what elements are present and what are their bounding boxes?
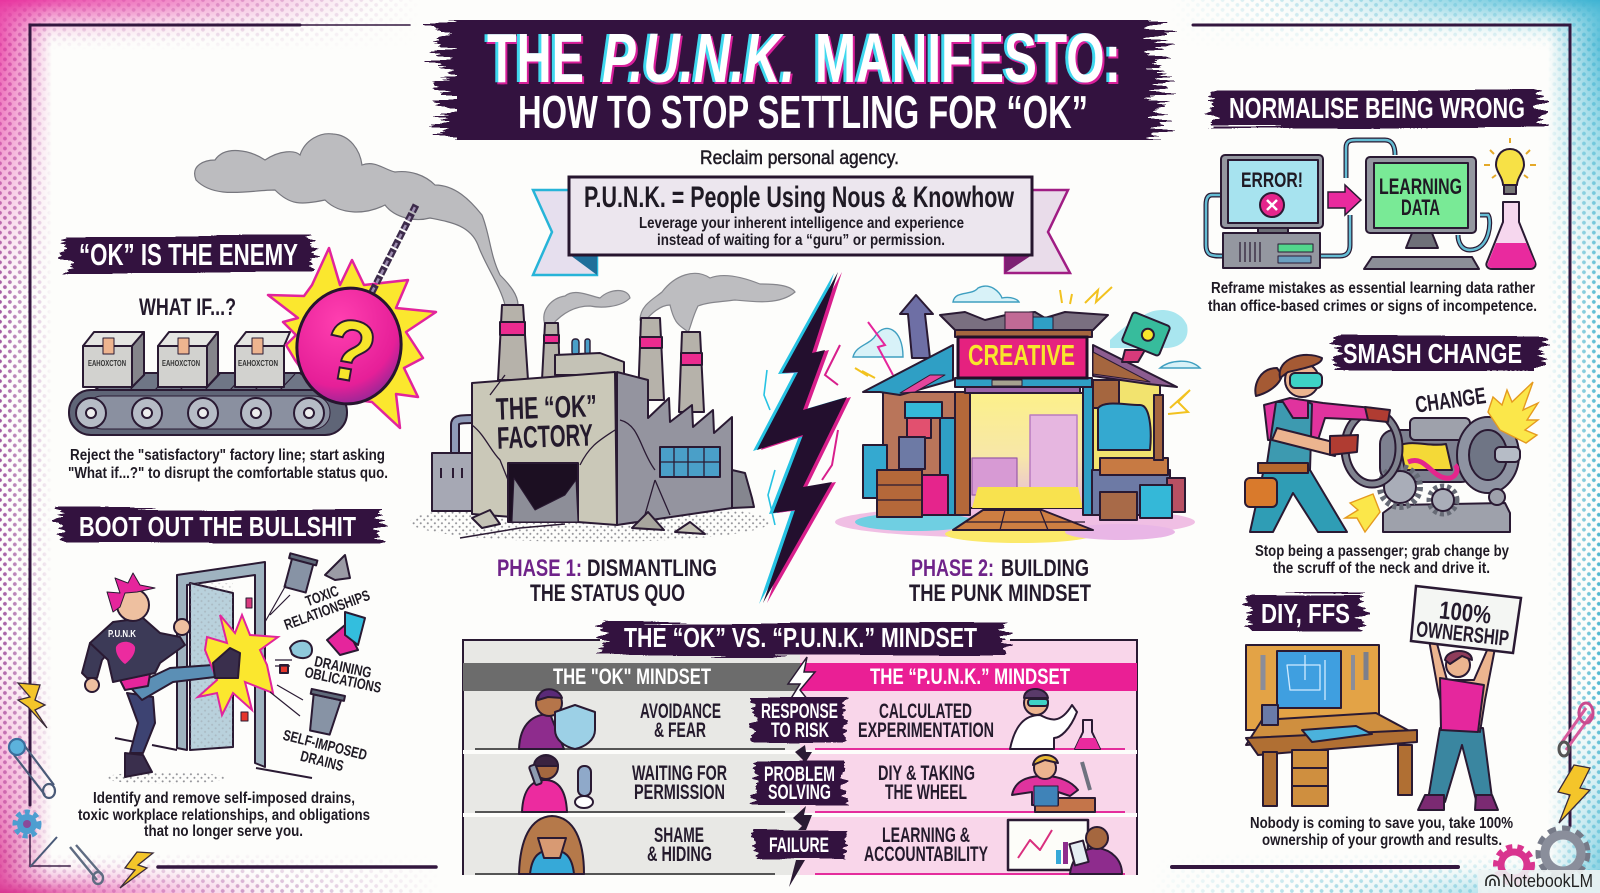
- flask: [1486, 202, 1536, 269]
- rubble: [460, 510, 705, 538]
- flying icons: [241, 553, 365, 736]
- factory label: THE “OK”: [495, 388, 597, 427]
- chimneys: [498, 305, 704, 412]
- drain labels: OBLICATIONS: [303, 664, 383, 697]
- ribbon heading: P.U.N.K. = People Using Nous & Knowhow: [584, 181, 1014, 214]
- center badge: [754, 830, 846, 859]
- walls: [883, 380, 1185, 515]
- legs: [1250, 470, 1347, 532]
- body text: [1250, 815, 1513, 849]
- title line 1: P.U.N.K.: [602, 19, 795, 97]
- machine: [1345, 412, 1520, 532]
- left label: [647, 824, 712, 866]
- body text: [1255, 543, 1509, 577]
- left label: & FEAR: [654, 719, 706, 742]
- overalls: [1266, 402, 1312, 470]
- column headers: THE "OK" MINDSET: [553, 664, 711, 689]
- column headers: THE “P.U.N.K.” MINDSET: [870, 664, 1070, 689]
- icon: pink gear: [1496, 847, 1532, 883]
- table title: THE “OK” VS. “P.U.N.K.” MINDSET: [624, 622, 977, 653]
- head: [117, 589, 149, 621]
- mohawk: [107, 573, 155, 612]
- ground shadow: [105, 772, 225, 784]
- standing boot: [125, 753, 152, 777]
- right label: DIY & TAKING: [878, 762, 975, 785]
- factory label: [495, 388, 597, 456]
- phase 2 caption: [909, 555, 1091, 607]
- drain labels: SELF-IMPOSED: [281, 727, 369, 764]
- left label: PERMISSION: [634, 781, 725, 804]
- section: boot out the bullshit: [60, 509, 383, 840]
- body text: [68, 447, 388, 482]
- icon: pink safety pin: [1559, 703, 1593, 756]
- jacket: [90, 618, 185, 682]
- factory label: FACTORY: [496, 417, 594, 456]
- creative sign: CREATIVE: [968, 340, 1075, 372]
- left label: [632, 762, 727, 804]
- boxes: EAHOXCTON: [88, 359, 126, 368]
- arrow: [1328, 185, 1361, 215]
- drain labels: DRAINS: [298, 748, 345, 775]
- left label: [640, 700, 721, 742]
- belt: [1258, 463, 1308, 473]
- jacket text: P.U.N.K: [108, 629, 137, 640]
- learning data computer: [1364, 157, 1479, 269]
- error computer: [1221, 155, 1323, 268]
- left label: & HIDING: [647, 843, 712, 866]
- gloves: [1365, 407, 1390, 422]
- heading: BOOT OUT THE BULLSHIT: [79, 511, 356, 542]
- left arm: [82, 643, 108, 678]
- phase 1 caption: PHASE 1:: [497, 555, 582, 582]
- heading: SMASH CHANGE: [1343, 338, 1522, 369]
- flask liquid: [1488, 243, 1535, 268]
- center badge: PROBLEM: [764, 763, 835, 786]
- section: OK is the enemy: [66, 205, 436, 482]
- drain labels: RELATIONSHIPS: [282, 587, 372, 634]
- right label: LEARNING &: [882, 824, 970, 847]
- arrow sign: [900, 295, 933, 358]
- factory cracks: [472, 375, 670, 525]
- punk figure: [82, 573, 215, 777]
- ribbon tails: [533, 190, 1070, 275]
- divider bolt: [788, 657, 815, 887]
- central lightning bolt: [753, 272, 851, 604]
- body text: than office-based crimes or signs of incompetence.: [1208, 298, 1537, 315]
- heading: [66, 236, 312, 274]
- center badge: RESPONSE: [761, 700, 838, 723]
- phase 2 caption: BUILDING: [1001, 555, 1089, 582]
- icon: yellow bolt right: [1558, 765, 1590, 823]
- left icon: worried person with shield: [519, 689, 595, 749]
- row: problem solving: [522, 755, 1095, 812]
- left icon: person on phone: [522, 755, 593, 812]
- learning data computer: LEARNING: [1379, 174, 1462, 199]
- right icon: scientist with flask: [1010, 689, 1100, 749]
- upper block: [555, 353, 624, 375]
- center badge: FAILURE: [769, 834, 829, 857]
- icon: blue gear: [15, 812, 39, 836]
- creative sign: [958, 337, 1087, 378]
- row: response to risk: [519, 689, 1100, 749]
- creative shack illustration: [835, 286, 1200, 607]
- ground splash: [835, 506, 1195, 543]
- factory window: [660, 447, 720, 477]
- phase 2 caption: PHASE 2:: [911, 555, 994, 582]
- icon: grey safety pin: [70, 845, 103, 884]
- factory illustration: [410, 273, 795, 607]
- brush stroke backing: [440, 20, 1160, 140]
- section: smash change: [1245, 335, 1542, 577]
- left fist: [85, 678, 99, 692]
- left icon: person hiding face: [519, 816, 584, 874]
- ribbon body text: Leverage your inherent intelligence and experience: [639, 215, 964, 232]
- body text: toxic workplace relationships, and obligations: [78, 807, 370, 824]
- icon: blue safety pin: [9, 739, 55, 798]
- roof: [863, 312, 1177, 395]
- body text: Nobody is coming to save you, take 100%: [1250, 815, 1513, 832]
- kicking leg: [130, 665, 215, 700]
- center badge: SOLVING: [768, 781, 831, 804]
- clouds: [853, 286, 1200, 368]
- crates and floor: [863, 445, 1172, 530]
- lower arm: [1272, 428, 1337, 456]
- body text: Stop being a passenger; grab change by: [1255, 543, 1509, 560]
- heading: [1248, 594, 1362, 631]
- ribbon body text: [639, 215, 964, 249]
- title line 1: MANIFESTO:: [815, 19, 1121, 97]
- big smoke plume: [195, 134, 518, 305]
- section: normalise being wrong: [1206, 89, 1541, 315]
- body text: "What if...?" to disrupt the comfortable status quo.: [68, 465, 388, 482]
- wrecking ball: [268, 205, 436, 428]
- factory right face: [617, 372, 732, 525]
- heading: “OK” IS THE ENEMY: [79, 237, 298, 272]
- standing leg: [127, 693, 155, 753]
- conveyor belt: [69, 373, 347, 435]
- factory front face: [472, 372, 617, 525]
- section: DIY FFS: [1246, 586, 1521, 849]
- table body: [463, 640, 1137, 875]
- icon: yellow bolt bottom: [120, 852, 153, 888]
- door: [115, 562, 312, 778]
- right fist: [174, 619, 190, 635]
- jacket emblem: [116, 642, 135, 664]
- center badge: TO RISK: [771, 719, 829, 742]
- body text: [1208, 280, 1537, 315]
- body text: that no longer serve you.: [144, 823, 303, 840]
- goggles: [1290, 373, 1322, 388]
- decorative badges and pins: [9, 683, 1593, 888]
- learning data computer: DATA: [1401, 195, 1440, 220]
- column headers: [463, 663, 1137, 691]
- right label: EXPERIMENTATION: [858, 719, 994, 742]
- tool pouch: [1245, 478, 1277, 507]
- factory smoke: [544, 273, 795, 332]
- heading: [1212, 89, 1541, 128]
- right label: [878, 762, 975, 804]
- ground rubble shadow: [410, 502, 770, 542]
- NotebookLM watermark: [1478, 870, 1600, 893]
- heading: DIY, FFS: [1261, 598, 1350, 629]
- center badge: [754, 761, 845, 805]
- title line 1: THE: [487, 19, 584, 97]
- body text: ownership of your growth and results.: [1262, 832, 1502, 849]
- ownership sign: [1411, 586, 1521, 653]
- ribbon panel: [569, 177, 1032, 255]
- right label: [858, 700, 994, 742]
- impact burst: [198, 615, 278, 715]
- sparks: [855, 287, 1190, 414]
- factory door: [508, 463, 578, 522]
- title line 1: [487, 19, 1121, 97]
- body text: the scruff of the neck and drive it.: [1273, 560, 1490, 577]
- spark bursts: [1345, 382, 1538, 532]
- what if label: WHAT IF...?: [139, 294, 236, 321]
- workbench: [1246, 645, 1417, 806]
- drain labels: DRAINING: [313, 653, 373, 682]
- body text: Reframe mistakes as essential learning data rather: [1211, 280, 1535, 297]
- boot on impact: [213, 648, 240, 678]
- right label: ACCOUNTABILITY: [864, 843, 988, 866]
- right label: THE WHEEL: [885, 781, 967, 804]
- phase 1 caption: THE STATUS QUO: [530, 580, 685, 607]
- factory annex and pipe: [432, 419, 754, 511]
- left label: AVOIDANCE: [640, 700, 721, 723]
- ribbon body text: instead of waiting for a “guru” or permission.: [657, 232, 945, 249]
- ownership figure: [1418, 640, 1498, 810]
- body text: [78, 790, 370, 840]
- title line 2: HOW TO STOP SETTLING FOR “OK”: [518, 86, 1088, 138]
- right label: CALCULATED: [879, 700, 972, 723]
- mechanic figure: [1245, 355, 1390, 532]
- icon: grey gear: [1539, 829, 1587, 877]
- left label: WAITING FOR: [632, 762, 727, 785]
- drain labels: [281, 583, 383, 775]
- tilted screen: [1121, 312, 1171, 362]
- comparison table: [463, 622, 1137, 887]
- change label: CHANGE: [1414, 382, 1487, 418]
- body text: Identify and remove self-imposed drains,: [93, 790, 355, 807]
- icon: small pin: [30, 837, 57, 867]
- left label: SHAME: [654, 824, 704, 847]
- phase 1 caption: [497, 555, 717, 607]
- boxes: EAHOXCTON: [238, 359, 278, 368]
- tagline: Reclaim personal agency.: [700, 148, 899, 169]
- shirt: [120, 674, 150, 690]
- row: failure: [519, 816, 1122, 874]
- phase 2 caption: THE PUNK MINDSET: [909, 580, 1091, 607]
- boxes: EAHOXCTON: [162, 359, 200, 368]
- title banner: [440, 19, 1160, 140]
- shirt: [1264, 398, 1372, 440]
- head: [1285, 363, 1319, 397]
- center badge: [753, 698, 846, 743]
- error computer: ERROR!: [1241, 169, 1303, 192]
- ponytail: [1255, 368, 1282, 396]
- wrecking ball: ?: [317, 300, 383, 403]
- boxes: [83, 332, 290, 387]
- right icon: DIY worker: [1012, 755, 1095, 812]
- definition ribbon: [533, 177, 1070, 275]
- right label: [864, 824, 988, 866]
- right icon: chart and analyst: [1008, 820, 1122, 874]
- ownership sign: 100%: [1438, 596, 1493, 630]
- connecting cables: [1206, 140, 1490, 256]
- phase 1 caption: DISMANTLING: [587, 555, 717, 582]
- drain labels: TOXIC: [303, 583, 341, 610]
- icon: yellow bolt left: [18, 683, 47, 728]
- ownership sign: OWNERSHIP: [1415, 616, 1510, 651]
- light bulb: [1484, 138, 1536, 194]
- hair: [1280, 355, 1322, 378]
- body text: Reject the "satisfactory" factory line; start asking: [70, 447, 385, 464]
